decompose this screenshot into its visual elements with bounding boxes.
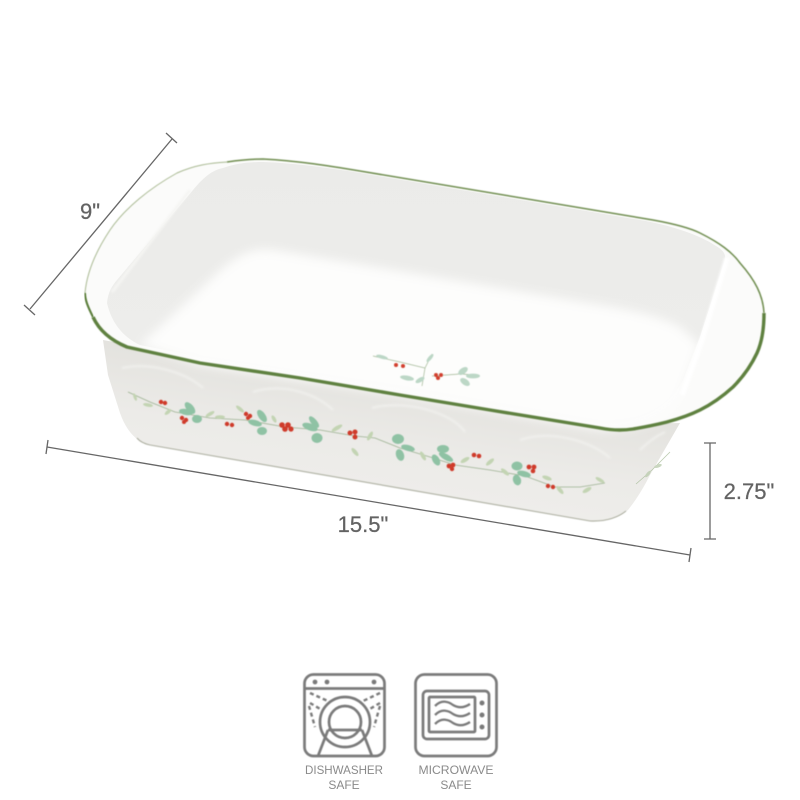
embossed scallop pattern bbox=[122, 366, 665, 458]
label: 2.75 inches: 2.75" bbox=[724, 479, 774, 504]
basin floor bbox=[140, 249, 700, 430]
label: 15.5 inches: 15.5" bbox=[338, 512, 388, 537]
vine bbox=[128, 392, 605, 487]
dishwasher frame bbox=[304, 674, 384, 756]
left rim green edge bbox=[85, 293, 93, 317]
upper rim green edge bbox=[227, 159, 764, 313]
upper-left rim thin edge bbox=[85, 162, 227, 317]
width end caps bbox=[24, 133, 177, 315]
length end caps bbox=[46, 440, 691, 562]
dish outer side wall bbox=[103, 340, 680, 521]
length line bbox=[47, 447, 690, 555]
motif stems bbox=[373, 354, 478, 386]
rim bbox=[85, 159, 764, 430]
motif berries bbox=[394, 363, 443, 380]
height end caps bbox=[704, 443, 716, 539]
handle ridge left bbox=[112, 190, 190, 292]
icon: dishwasher safe bbox=[304, 674, 384, 756]
microwave body bbox=[423, 691, 489, 739]
panel dots bbox=[313, 680, 376, 684]
microwave door bbox=[429, 697, 475, 732]
dimension: height 2.75 inches bbox=[704, 443, 716, 539]
width line bbox=[30, 139, 172, 309]
heat waves bbox=[435, 702, 470, 725]
red berries bbox=[159, 400, 555, 489]
icon: microwave safe bbox=[416, 674, 496, 756]
dimension: width 9 inches bbox=[24, 133, 177, 315]
label: microwave safe: MICROWAVE bbox=[418, 763, 494, 777]
microwave frame bbox=[416, 674, 496, 756]
small pale leaves bbox=[132, 393, 605, 495]
label: dishwasher safe: DISHWASHER bbox=[305, 763, 383, 777]
control dots bbox=[480, 700, 484, 730]
plate bbox=[320, 697, 370, 747]
label: dishwasher safe: SAFE bbox=[328, 778, 360, 792]
label: microwave safe: SAFE bbox=[440, 778, 472, 792]
holly garland on side bbox=[128, 392, 605, 495]
height line bbox=[709, 443, 711, 539]
faint motif on right end bbox=[636, 452, 670, 484]
dish rack bbox=[318, 730, 372, 756]
baking dish bbox=[85, 159, 764, 521]
motif leaves bbox=[376, 353, 480, 388]
water sprays bbox=[309, 693, 380, 727]
dimension: length 15.5 inches bbox=[46, 440, 691, 562]
handle ridge right bbox=[682, 258, 727, 395]
label: 9 inches: 9" bbox=[80, 199, 100, 224]
dish bottom edge shadow bbox=[137, 438, 626, 521]
basin inner wall bbox=[107, 162, 725, 423]
lower rim green band bbox=[93, 313, 764, 430]
control panel line bbox=[304, 687, 384, 690]
leaves bbox=[179, 400, 532, 487]
holly motif on dish floor bbox=[373, 353, 480, 388]
